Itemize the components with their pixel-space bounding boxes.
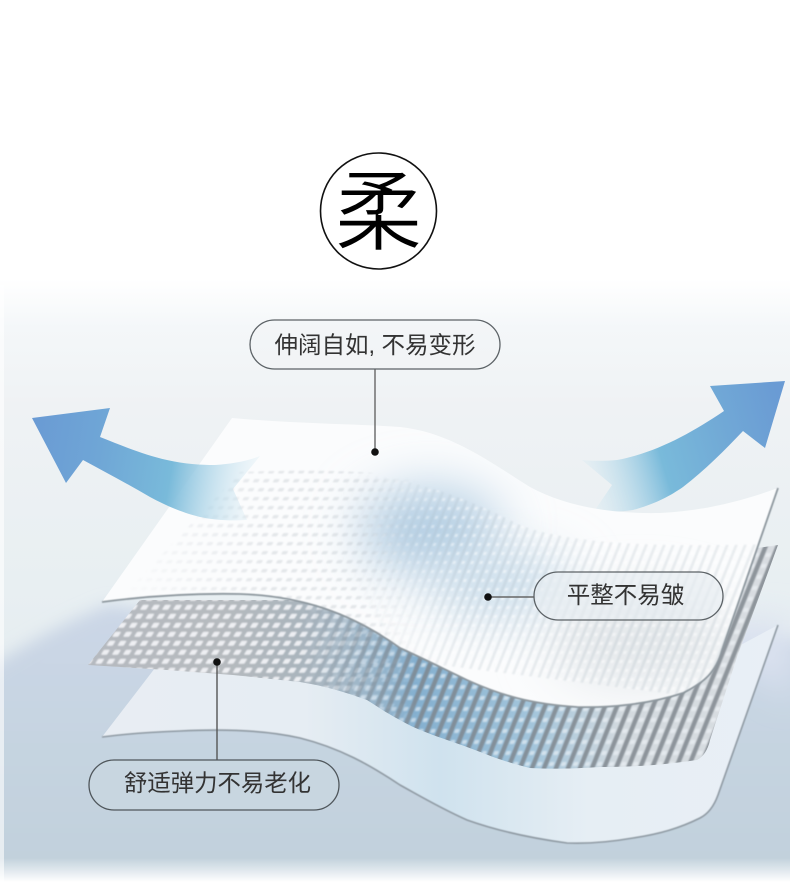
bottom layer sheet [102,625,778,843]
callout: right label [484,572,723,620]
callout: bottom label [89,658,339,810]
title badge: 柔: 柔 [334,163,423,262]
left arrow [32,408,260,520]
callout: bottom label: 舒适弹力不易老化 [124,770,311,796]
callout: top label [250,320,500,456]
callout: right label: 平整不易皱 [567,582,684,608]
title badge: 柔 [320,153,436,269]
callout: top label: 伸阔自如, 不易变形 [274,332,476,358]
middle mesh layer [80,540,790,780]
right arrow [582,381,785,512]
top layer sheet [100,418,778,707]
